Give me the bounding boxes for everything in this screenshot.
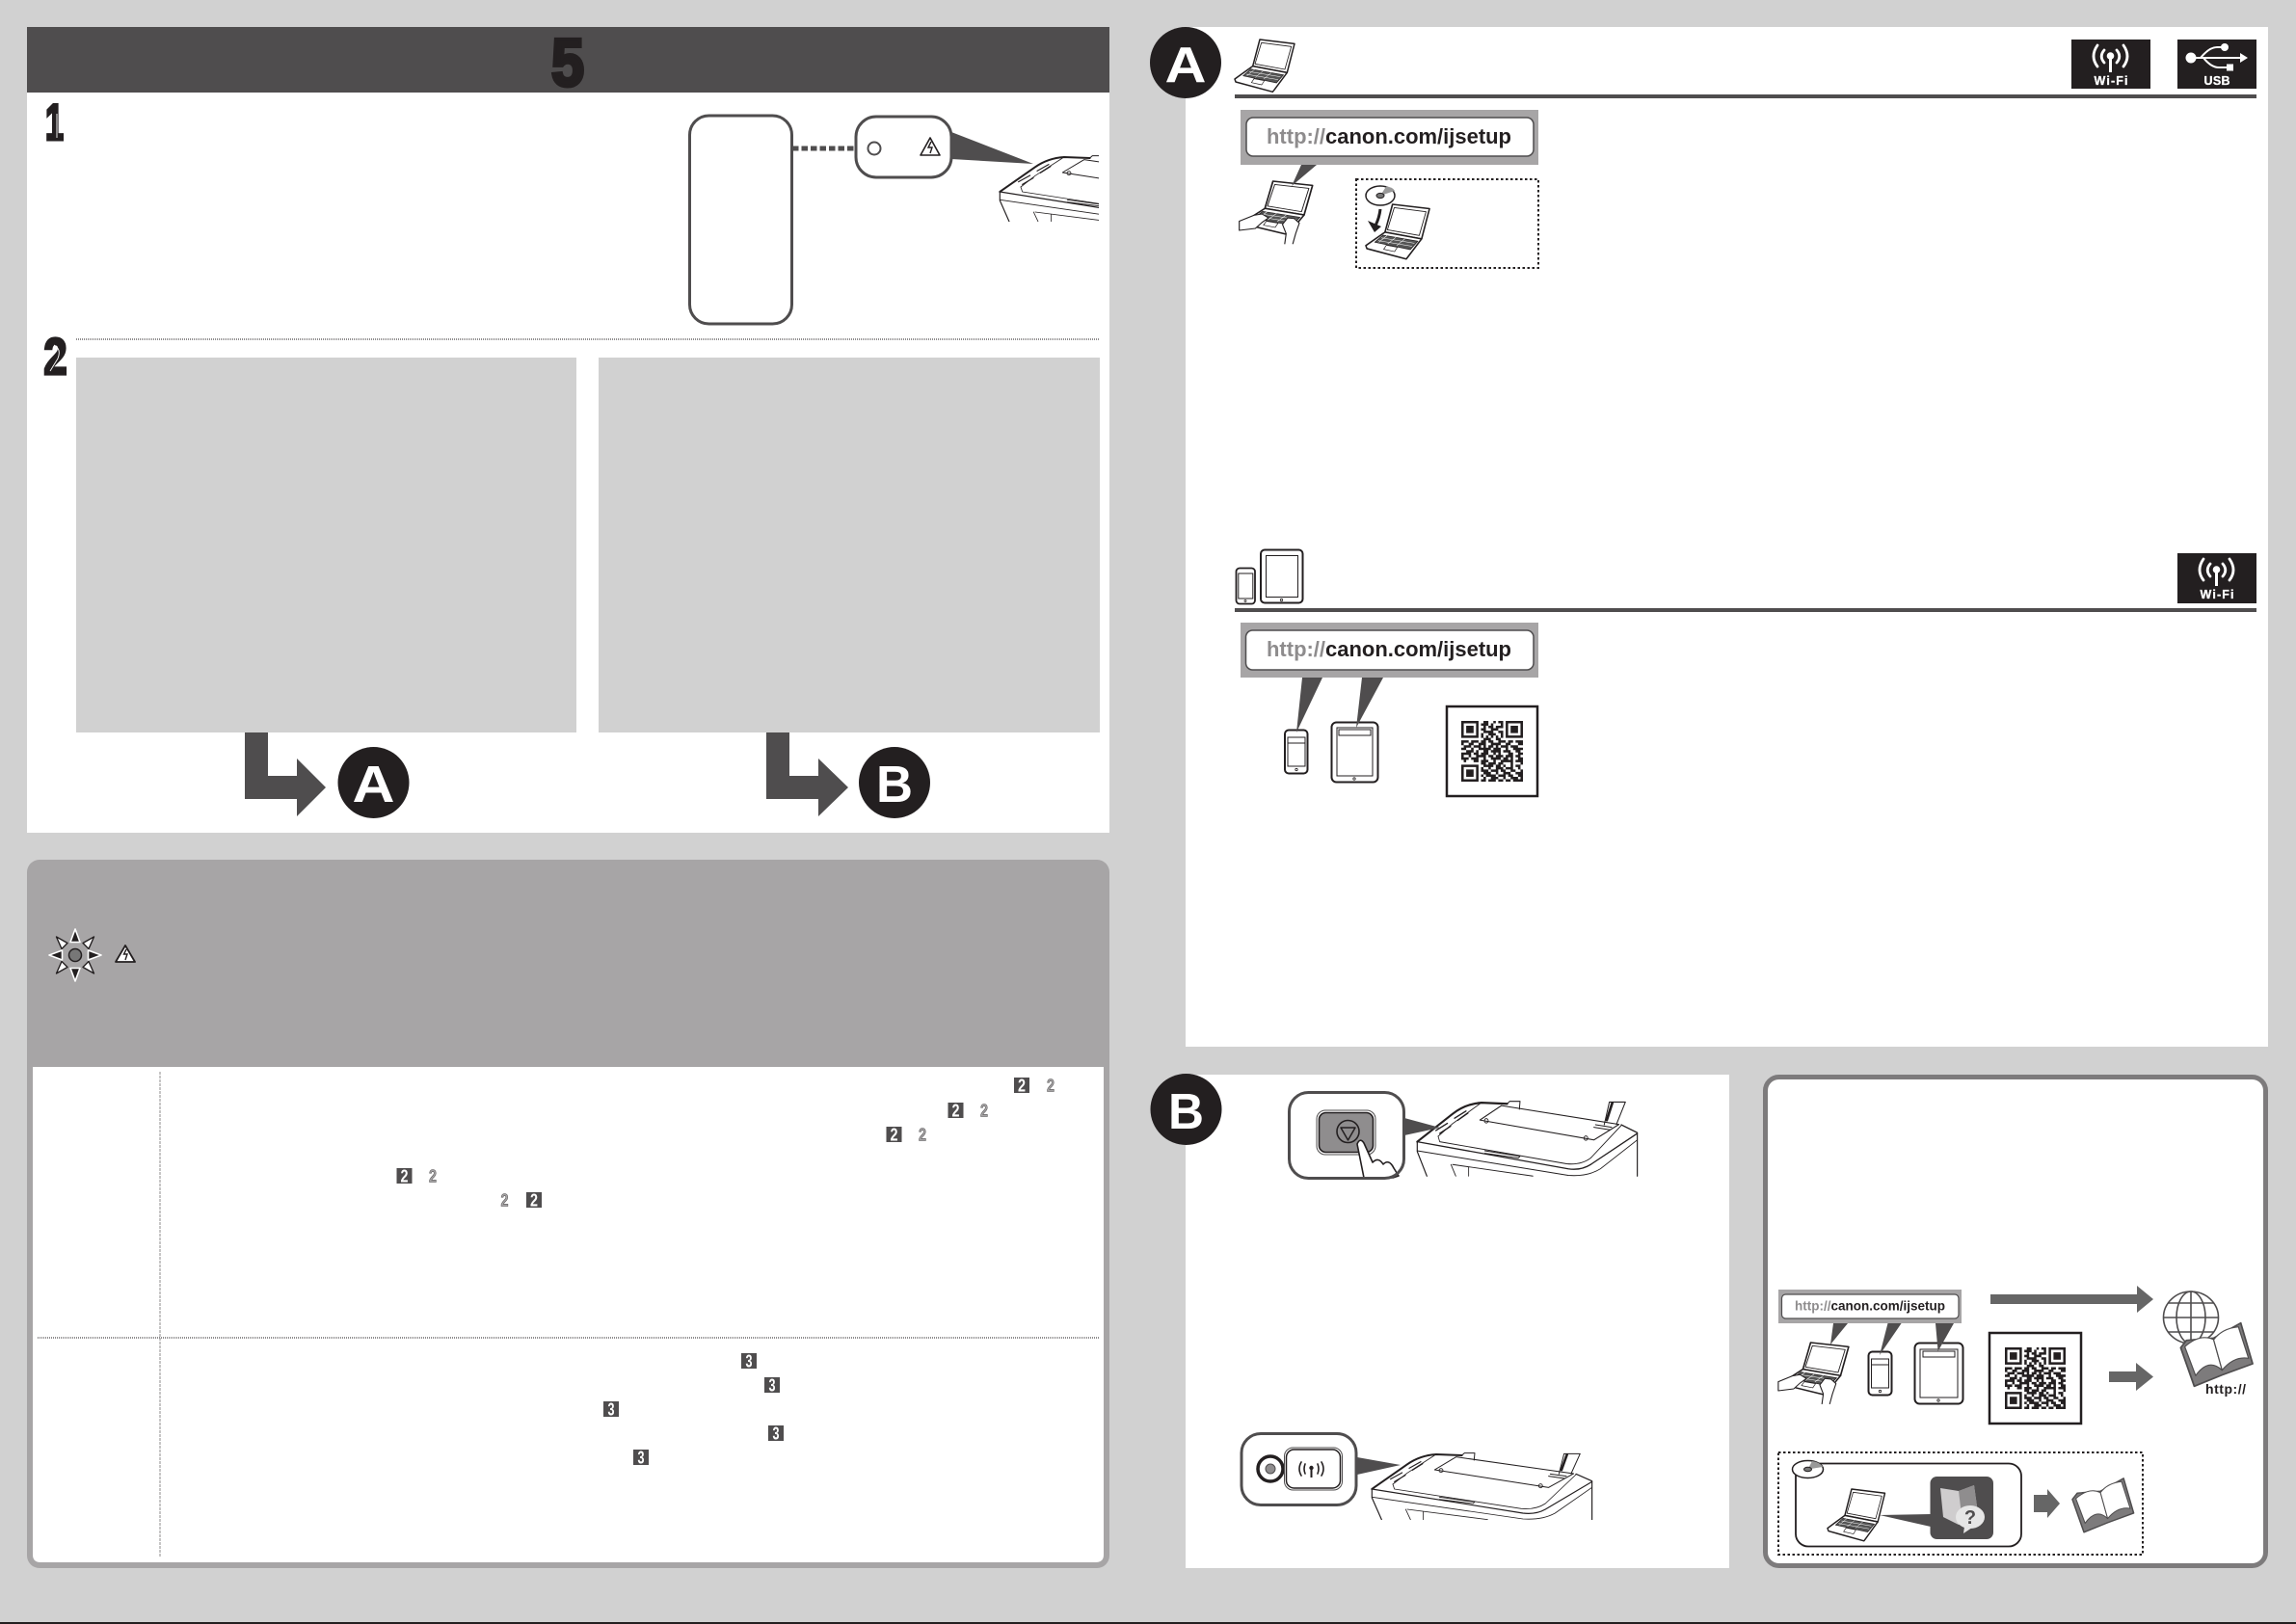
icon: Wi-Fi badge mobile bbox=[2177, 553, 2256, 603]
URL bar mobile: http://canon.com/ijsetup bbox=[1267, 637, 1511, 661]
icon: help manual app: ? bbox=[1964, 1507, 1976, 1529]
step references, row group 1: 2 bbox=[1047, 1076, 1055, 1095]
icon: small laptop bbox=[1828, 1489, 1885, 1541]
blank tall callout box bbox=[690, 116, 792, 324]
header band with step number bbox=[27, 25, 1109, 100]
section rule mobile bbox=[1235, 608, 2256, 612]
step references, row group 1: 2 bbox=[919, 1126, 926, 1145]
icon: globe bbox=[2163, 1291, 2219, 1344]
badge A: A bbox=[353, 756, 395, 813]
step references, row group 1: 2 bbox=[530, 1191, 538, 1211]
step references, row group 1: 2 bbox=[952, 1101, 960, 1120]
icon: flashing lamp bbox=[49, 929, 101, 981]
panel: A software setup bbox=[1150, 27, 2268, 1047]
rounded frame bbox=[1796, 1463, 2021, 1546]
QR code box bbox=[1447, 706, 1537, 796]
callout wedge bbox=[1292, 165, 1317, 186]
step references, row group 1: 2 bbox=[980, 1101, 988, 1120]
step references, row group 2: 3 bbox=[773, 1424, 779, 1444]
dashed box: disc manual bbox=[1778, 1452, 2143, 1555]
printer illustration top bbox=[1417, 1102, 1638, 1176]
icon: tablet bbox=[1914, 1344, 1962, 1403]
header band with step number: 5 bbox=[551, 25, 584, 100]
badge B bbox=[1151, 1074, 1222, 1145]
step references, row group 2: 3 bbox=[607, 1399, 615, 1419]
URL bar computer bbox=[1241, 110, 1538, 165]
step references, row group 2 bbox=[603, 1351, 784, 1467]
badge B bbox=[859, 747, 930, 818]
icon: small manual book bbox=[2072, 1478, 2134, 1532]
icon: phone bbox=[1285, 731, 1307, 773]
icon: phone bbox=[1868, 1351, 1891, 1396]
printer illustration bbox=[999, 155, 1099, 222]
icon: USB badge: USB bbox=[2203, 74, 2230, 88]
panel: step 5 setup bbox=[27, 25, 1220, 833]
badge A: A bbox=[1164, 38, 1207, 93]
icon: laptop with hands bbox=[1240, 181, 1313, 244]
callout wedges bbox=[1830, 1323, 1954, 1355]
QR code box bbox=[1989, 1333, 2081, 1424]
badge A bbox=[337, 747, 409, 818]
step references, row group 1 bbox=[397, 1076, 1055, 1211]
Wi-Fi button callout bbox=[1241, 1434, 1401, 1505]
option box B bbox=[599, 358, 1100, 732]
stop button callout bbox=[1290, 1093, 1440, 1178]
badge B: B bbox=[876, 756, 913, 813]
icon: phone and tablet heading bbox=[1236, 549, 1303, 603]
option box A bbox=[76, 358, 576, 732]
icon: tablet bbox=[1332, 723, 1378, 783]
step references, row group 1: 2 bbox=[401, 1166, 409, 1185]
icon: disc bbox=[1793, 1461, 1824, 1478]
panel: B printer buttons bbox=[1151, 1074, 1729, 1568]
URL bar computer: http://canon.com/ijsetup bbox=[1267, 124, 1511, 148]
panel: alarm lamp troubleshooting bbox=[27, 860, 1109, 1568]
dashed box: install from disc bbox=[1356, 179, 1538, 268]
step references, row group 2: 3 bbox=[746, 1351, 752, 1371]
printer close-up callout bbox=[856, 117, 1033, 177]
step references, row group 1: 2 bbox=[501, 1191, 509, 1211]
dashed connector bbox=[792, 146, 868, 150]
arrow to book bbox=[2034, 1489, 2060, 1518]
icon: laptop heading bbox=[1235, 40, 1295, 92]
step references, row group 2: 3 bbox=[769, 1376, 775, 1396]
short arrow to manual bbox=[2109, 1363, 2153, 1391]
icon: Wi-Fi badge bbox=[2071, 40, 2150, 89]
icon: Wi-Fi badge: Wi-Fi bbox=[2094, 74, 2128, 88]
long arrow to manual bbox=[1990, 1286, 2153, 1313]
icon: USB badge bbox=[2177, 40, 2256, 89]
callout wedge phone bbox=[1296, 678, 1322, 732]
icon: pressing hand bbox=[1357, 1140, 1399, 1178]
label: web address: http:// bbox=[2205, 1381, 2246, 1397]
callout wedge tablet bbox=[1356, 678, 1383, 728]
icon: manual book bbox=[2180, 1323, 2253, 1386]
step references, row group 1: 2 bbox=[891, 1126, 898, 1145]
URL bar bbox=[1778, 1290, 1962, 1323]
badge A bbox=[1150, 27, 1221, 98]
step number 1 bbox=[45, 94, 64, 151]
panel: online manual bbox=[1766, 1078, 2265, 1565]
step number 1: 1 bbox=[45, 94, 64, 151]
step number 2: 2 bbox=[44, 329, 67, 386]
URL bar mobile bbox=[1241, 623, 1538, 678]
icon: Wi-Fi badge mobile: Wi-Fi bbox=[2200, 588, 2234, 601]
step references, row group 2: 3 bbox=[638, 1448, 644, 1467]
arrow to A bbox=[245, 732, 326, 816]
icon: warning triangle bbox=[116, 945, 135, 962]
icon: laptop with hands bbox=[1778, 1343, 1849, 1404]
printer illustration bottom bbox=[1372, 1453, 1592, 1520]
table grid bbox=[38, 1072, 1099, 1557]
URL bar: http://canon.com/ijsetup bbox=[1795, 1299, 1945, 1313]
section rule computer bbox=[1235, 94, 2256, 98]
divider bbox=[76, 338, 1100, 340]
step references, row group 1: 2 bbox=[1018, 1076, 1026, 1095]
step references, row group 1: 2 bbox=[429, 1166, 437, 1185]
arrow to B bbox=[766, 732, 848, 816]
badge B: B bbox=[1168, 1084, 1204, 1140]
icon: help manual app bbox=[1880, 1477, 1993, 1539]
